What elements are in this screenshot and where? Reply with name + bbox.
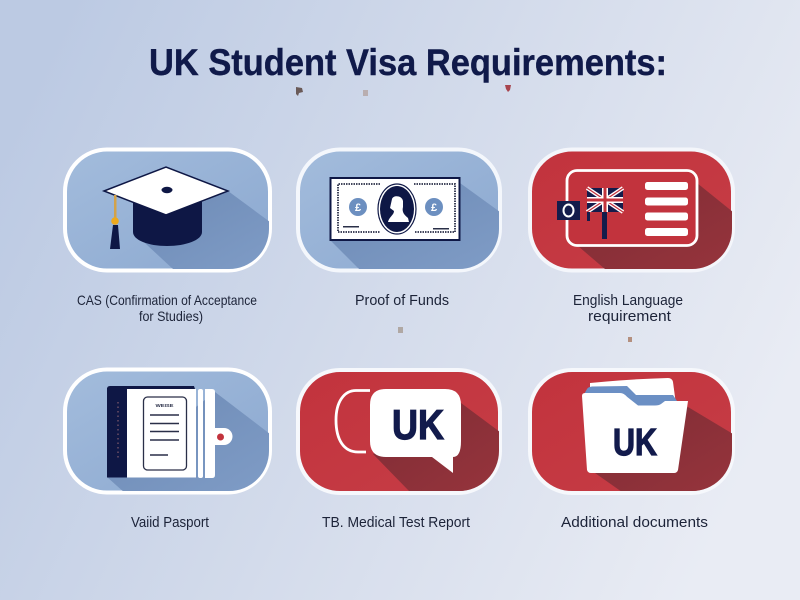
icon: passport: WEISE (156, 403, 174, 408)
icon: banknote (330, 178, 460, 240)
panel: additional documents (530, 370, 733, 493)
label: CAS (77, 292, 257, 324)
shadow: banknote (330, 183, 500, 270)
title: UK Student Visa Requirements: (149, 42, 667, 83)
panel: English language (530, 150, 733, 270)
label: English language: requirement (588, 308, 672, 325)
label: additional documents: Additional documents (561, 514, 708, 531)
icon: passport (107, 386, 232, 478)
icon: banknote: £ (431, 202, 437, 214)
shadow: bubble (373, 403, 500, 492)
shadow: card (578, 183, 733, 270)
icon: folder (582, 378, 688, 473)
icon: banknote: £ (355, 202, 361, 214)
icon: speech bubble: UK (392, 401, 444, 448)
label: English language: English Language (573, 292, 683, 309)
label: CAS: CAS (Confirmation of Acceptance (77, 292, 257, 308)
icon: graduation cap (104, 167, 228, 249)
label: proof of funds: Proof of Funds (355, 292, 449, 309)
label: CAS: for Studies) (139, 308, 203, 324)
panel: passport (65, 370, 270, 494)
decorative specks (296, 85, 632, 342)
icon: open bracket (336, 390, 370, 452)
shadow: cap (144, 192, 269, 269)
icon: folder: UK (613, 422, 657, 464)
panel: TB medical (298, 370, 500, 493)
icon: union flag (587, 188, 623, 239)
shadow: folder (595, 407, 733, 492)
label: TB medical: TB. Medical Test Report (322, 514, 471, 531)
label: passport: Vaiid Pasport (131, 514, 210, 531)
icon: O tag (557, 201, 580, 220)
panel: CAS (65, 150, 270, 270)
shadow: passport (107, 392, 270, 494)
icon: speech bubble (370, 389, 461, 473)
label: English language (573, 292, 683, 325)
icon: language card (557, 170, 697, 246)
panel: proof of funds (298, 150, 500, 270)
